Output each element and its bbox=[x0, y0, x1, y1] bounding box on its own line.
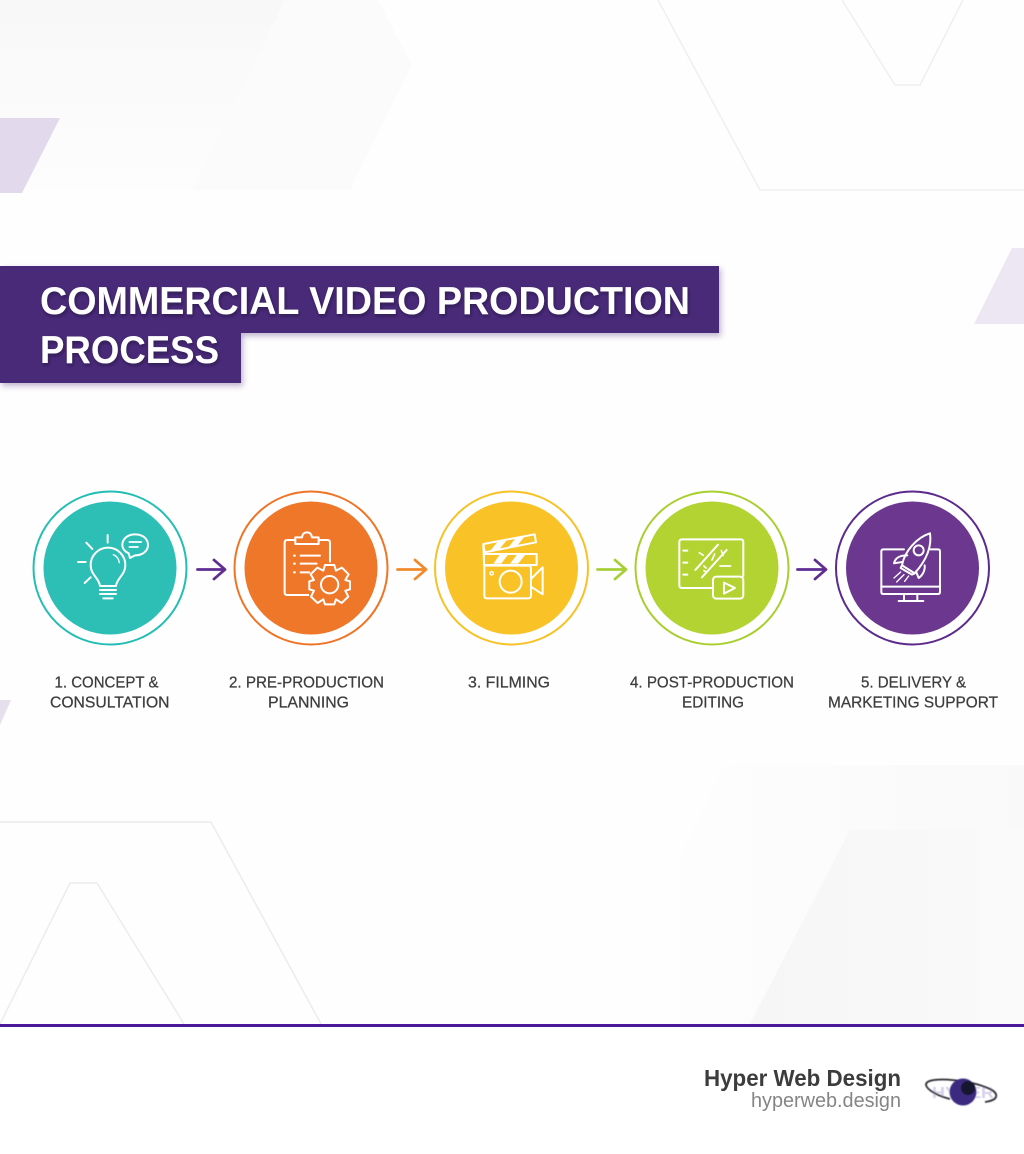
icon: editing timeline with play button bbox=[679, 539, 743, 599]
label bbox=[630, 674, 794, 712]
step 1: concept and consultation bbox=[34, 492, 186, 712]
icon: clapperboard and camera bbox=[483, 534, 543, 598]
logo bbox=[926, 1078, 996, 1106]
label bbox=[50, 674, 170, 712]
title banner bbox=[0, 266, 719, 383]
circle: teal bbox=[34, 492, 186, 644]
arrow 3 bbox=[598, 560, 626, 579]
step 5: delivery and marketing support bbox=[828, 492, 998, 712]
step 2: pre-production planning bbox=[229, 492, 388, 712]
label: MARKETING SUPPORT bbox=[828, 694, 998, 712]
label bbox=[229, 674, 384, 712]
icon: clipboard with gear bbox=[285, 532, 350, 604]
arrow 1 bbox=[198, 560, 225, 579]
logo: HYPER bbox=[932, 1085, 995, 1102]
label: 5. DELIVERY & bbox=[861, 674, 966, 692]
step 3: filming bbox=[435, 492, 588, 692]
circle: lime bbox=[636, 492, 788, 644]
brand url: hyperweb.design bbox=[751, 1090, 901, 1112]
footer bbox=[0, 1024, 1024, 1154]
label: 1. CONCEPT & bbox=[54, 674, 159, 692]
label bbox=[828, 674, 998, 712]
footer rule bbox=[0, 1024, 1024, 1027]
icon: rocket launching from monitor bbox=[881, 533, 940, 601]
title text: COMMERCIAL VIDEO PRODUCTION bbox=[40, 280, 690, 323]
icon: light bulb with speech bubble bbox=[78, 534, 148, 598]
circle: orange bbox=[234, 492, 388, 644]
banner background bbox=[0, 266, 719, 383]
label: CONSULTATION bbox=[50, 694, 170, 712]
brand name: Hyper Web Design bbox=[704, 1065, 901, 1091]
title text bbox=[40, 280, 690, 372]
circle: yellow bbox=[435, 492, 588, 644]
label: PLANNING bbox=[268, 694, 349, 712]
step 4: post-production editing bbox=[630, 492, 794, 712]
title text: PROCESS bbox=[40, 329, 219, 372]
footer band bbox=[0, 1026, 1024, 1154]
label: 3. FILMING bbox=[468, 674, 550, 692]
arrow 2 bbox=[398, 560, 426, 579]
label: 2. PRE-PRODUCTION bbox=[229, 674, 384, 692]
circle: purple bbox=[836, 492, 989, 644]
label: EDITING bbox=[682, 694, 744, 712]
label: 4. POST-PRODUCTION bbox=[630, 674, 794, 692]
arrow 4 bbox=[798, 560, 826, 579]
